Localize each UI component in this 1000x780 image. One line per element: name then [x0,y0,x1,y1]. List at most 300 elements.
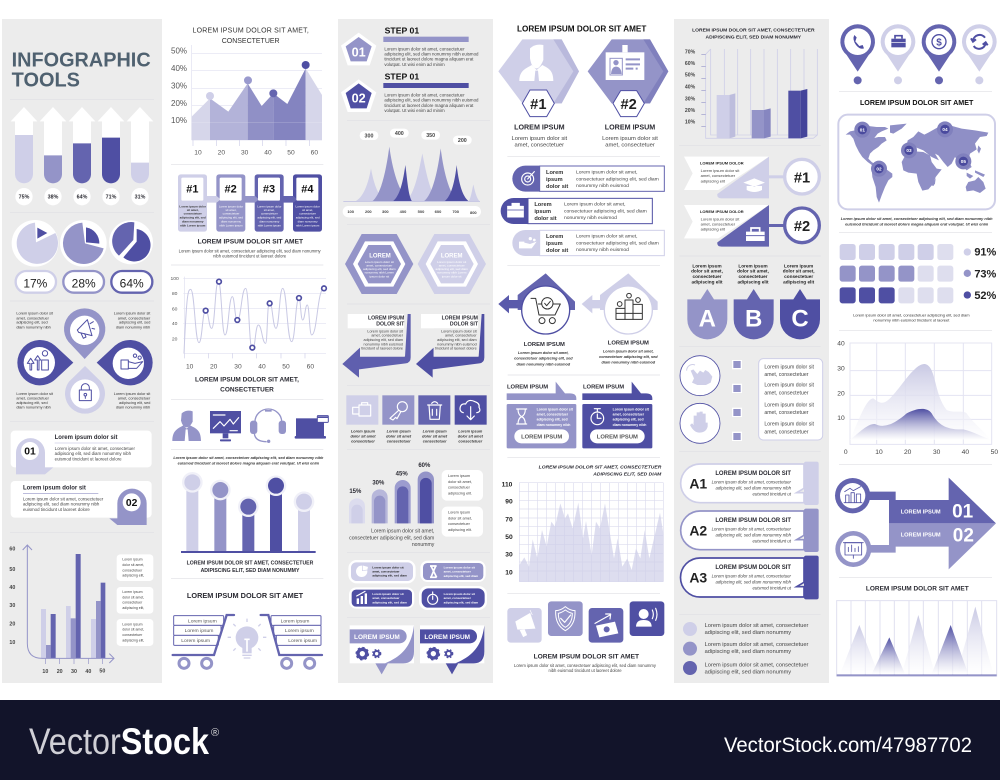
bar chart: 40 [9,585,15,591]
back arrow 2: nonummy nibh euismod [437,342,477,346]
text box: Lorem ipsum dolor sit [764,402,814,408]
tab card A3: euismod tincidunt ut [752,586,792,591]
icon: businessman [172,411,201,441]
card 02: adipiscing elit, sed diam nonummy nibh [23,502,100,507]
icon tile captions: Lorem ipsum [351,430,376,434]
text block: arrow circle captions [514,340,658,366]
text block: arrow circle captions: Lorem ipsum dolor sit amet, [518,351,569,355]
bar chart: 50 [9,567,15,573]
step 02 block: volutpat. Ut wisi enim ad minim [384,108,445,113]
text block: steps caption: nibh euismod tincidunt ut laoreet dolore [213,253,287,258]
numbered steps #1-#4: adipiscing elit, sed [180,216,206,220]
icon tile captions: dolor sit amet [350,435,376,439]
step 01 block: adipiscing elit, sed diam nonummy nibh euismod [384,52,479,57]
arrow bar chart: 75% [19,195,30,201]
icon: presentation board [843,543,863,558]
arrow diagram: 01 [952,502,974,523]
bar chart notes [117,554,153,646]
teardrop text blocks: diam nonummy nibh [116,325,150,329]
card 02: euismod tincidunt ut laoreet dolore [23,507,90,512]
text block: arrow circle captions: Lorem ipsum dolor sit amet, [603,349,654,353]
tab card A3: Lorem ipsum dolor sit amet, consectetuer [712,573,792,578]
cart left: Lorem ipsum [188,618,217,624]
bar chart: 10 [42,669,48,675]
smooth area chart: 0 [844,449,848,456]
list row 3 [512,230,664,256]
icon tile: megaphone [507,608,542,643]
text block: icon tiles caption: LOREM IPSUM DOLOR SIT AMET [534,653,639,660]
pie charts [12,220,153,267]
numbered steps #1-#4: consectetuer [184,212,203,216]
info pills: amet, consectetuer [444,569,472,573]
hexagon badge 2: ipsum dolor sit [442,274,462,278]
gesture icons [680,356,720,443]
hexagon badge 1: ipsum dolor sit [370,274,389,278]
smooth area chart: 10 [837,415,845,422]
text block: waffle caption: nonummy nibh euismod tincidunt ut laoreet [873,318,950,323]
step 01 block: tincidunt ut laoreet dolore magna aliquam erat [384,57,474,62]
numbered steps #1-#4: diam nonummy [221,219,242,223]
arched chart notes: consectetuer [448,486,471,490]
info pills: Lorem ipsum dolor sit [372,592,404,596]
numbered steps #1-#4: sit amet, [225,208,237,212]
arrow diagram [835,478,996,569]
panel: column 6 [835,24,998,676]
numbered steps #1-#4: adipiscing elit, sed [257,216,282,220]
arrow diagram: LOREM IPSUM [901,509,941,515]
map pin: briefcase [881,24,915,84]
numbered steps #1-#4 [178,174,322,232]
bullet legend: Lorem ipsum dolor sit amet, consectetuer [705,663,809,669]
peak chart: 100 [347,209,355,214]
tab card A2: LOREM IPSUM DOLOR SIT [715,518,791,524]
text block: lollipop intro: Lorem ipsum dolor sit amet, consectetuer adipiscing elit, sed diam nonummy nibh [173,456,324,460]
area chart: 60 [311,150,318,157]
text block: steps caption: Lorem ipsum dolor sit amet, consectetuer adipiscing elit, sed diam nonummy [179,248,322,253]
bullet legend: adipiscing elit, sed diam nonummy [705,630,791,636]
back arrow 1: Lorem ipsum dolor sit [367,329,403,333]
card 01: Lorem ipsum dolor sit amet, consectetuer [55,446,135,451]
text block: lollipop intro: euismod tincidunt ut laoreet dolore magna aliquam erat volutpat. Ut wisi enim [178,461,320,465]
numbered steps #1-#4: diam nonummy [182,219,204,223]
arched bar chart: 30% [372,480,385,486]
footer logo: VectorStock [29,721,209,762]
heading: area chart: CONSECTETUER [222,38,280,45]
bar chart: 60 [9,546,15,552]
profile hexagon #1: LOREM IPSUM [514,123,565,131]
hexagon badge 2 [418,234,486,294]
percentage pills [16,271,152,293]
text block: A B C captions: dolor sit amet, [783,269,815,274]
card 01: 01 [24,447,36,458]
heading: area chart: LOREM IPSUM DOLOR SIT AMET, [192,28,309,35]
numbered steps #1-#4: sit amet, [302,208,313,212]
ribbon #1 [684,157,819,198]
bubble card 1 [507,382,576,448]
tab card A2: Lorem ipsum dolor sit amet, consectetuer [712,526,792,531]
map pin: refresh [962,24,997,84]
peak chart: 200 [365,209,372,214]
text block: lollipop caption: LOREM IPSUM DOLOR SIT AMET, CONSECTETUER [187,560,314,566]
panel: column 1 [2,19,162,683]
text block: A B C captions: adipiscing elit [691,279,723,284]
list row 1: nonummy nibh euismod [576,183,629,189]
bubble card 1: Lorem ipsum dolor sit [537,407,574,411]
info pills [348,560,487,610]
line chart: 40 [172,321,178,327]
ribbon #1: amet, consectetuer [701,173,736,178]
bar chart notes: adipiscing elit, [122,574,144,578]
tab card A2: adipiscing elit, sed diam nonummy nibh [715,532,792,537]
footer url: VectorStock.com/47987702 [724,734,972,757]
step 02 block: adipiscing elit, sed diam nonummy nibh euismod [384,98,479,103]
back arrow 2: tincidunt ut laoreet dolore [435,347,477,351]
cart right: Lorem ipsum [281,618,309,624]
bar chart notes: consectetuer [122,601,143,605]
text block: grid chart title: ADIPISCING ELIT, SED DIAM [592,471,662,477]
cart right [261,615,322,668]
list row 3: nonummy nibh euismod [576,247,629,253]
hexagon badge 2: Lorem ipsum dolor sit [437,260,466,264]
tab card A2: euismod tincidunt ut [752,539,792,544]
list row 3: Lorem [546,234,563,240]
smooth area chart: 20 [904,449,912,456]
text block: lollipop caption: ADIPISCING ELIT, SED DIAM NONUMMY [201,568,300,574]
text block: steps caption: LOREM IPSUM DOLOR SIT AMET [198,238,303,245]
teardrop text blocks: amet, consectetuer [118,316,151,320]
text box: amet, consectetuer [764,429,809,435]
back arrow 1: LOREM IPSUM [368,315,404,321]
icon: growing people [27,351,48,370]
icon tile captions: dolor sit amet [422,435,448,439]
teardrop text blocks: Lorem ipsum dolor sit [16,392,54,396]
line chart: 50 [282,363,290,370]
bubble card 1: LOREM IPSUM [521,434,562,440]
arched chart notes: dolor sit amet, [448,480,472,484]
list row 2: consectetuer adipiscing elit, sed diam [564,208,647,214]
bar chart notes: adipiscing elit, [122,638,144,642]
info pills: amet, consectetuer [444,596,472,600]
bullet legend: Lorem ipsum dolor sit amet, consectetuer [705,642,809,648]
ribbon #1: Lorem ipsum dolor sit [701,168,740,173]
bubble card 2: diam nonummy nibh [613,423,646,427]
icon: shopping cart [531,298,560,324]
map pin: dollar: $ [936,37,942,48]
icon tile: cloud download [455,395,487,425]
gradient peaks chart [837,601,997,676]
tab card A3: A3 [689,569,707,585]
hexagon badge 2: nonummy nibh Lorem [437,271,467,275]
arched chart notes: adipiscing elit. [448,528,472,532]
cart left [173,615,234,668]
bar chart: 40 [85,669,91,675]
profile hexagon #1: Lorem ipsum dolor sit [511,136,568,142]
step 01 block: STEP 01 [385,25,419,35]
smooth area chart: 10 [875,449,883,456]
tab card A1: adipiscing elit, sed diam nonummy nibh [715,485,792,490]
step 02 block: Lorem ipsum dolor sit amet, consectetuer [384,92,465,97]
step 02 block: tincidunt ut laoreet dolore magna aliquam erat [384,103,474,108]
icon tile captions: Lorem ipsum [423,430,447,434]
numbered steps #1-#4: #3 [263,184,275,196]
icon: bar chart [844,487,862,503]
hexagon badge 1: LOREM [369,253,391,259]
map pin: phone [840,24,875,84]
peak chart: 500 [418,209,425,214]
3D bar chart: 70% [685,49,696,55]
back arrow 2 [416,314,484,378]
text block: A B C captions: Lorem ipsum [738,264,768,269]
hexagon badge 1 [345,234,413,294]
step 01 block: volutpat. Ut wisi enim ad minim [384,62,445,67]
numbered steps #1-#4: consectetuer [261,212,278,216]
list row 2: nonummy nibh euismod [564,215,617,221]
text block: arrow circle captions: consectetuer adipiscing elit, sed [514,357,573,361]
arched chart notes: Lorem ipsum [448,474,470,478]
text block: steps caption [179,238,322,258]
icon tile captions: dolor sit amet [458,435,484,439]
teardrop text blocks: Lorem ipsum dolor sit [16,312,54,316]
peak chart: 400 [400,209,407,214]
grid area chart: 50 [505,534,513,541]
arched bar chart: 15% [349,489,362,495]
bubble card 1: adipiscing elit, sed [537,418,568,422]
bubble card 2 [582,382,652,448]
numbered steps #1-#4: #2 [225,184,237,196]
tab card A1 [681,462,819,505]
numbered steps #1-#4: nibh Lorem ipsum [258,223,282,227]
bar chart notes: Lorem ipsum [122,590,143,594]
grid area chart: 30 [505,552,513,559]
numbered steps #1-#4: #1 [186,184,198,196]
icon: people on podium [616,293,642,319]
back arrow 2: DOLOR SIT [450,322,479,328]
area chart: 40 [264,150,272,157]
area chart [171,45,322,157]
text block: arrow circle captions: LOREM IPSUM [524,342,565,348]
title: TOOLS [12,69,80,92]
ribbon #2 [684,205,819,247]
3D bar chart: 60% [685,61,696,67]
teardrop text blocks: diam nonummy nibh [16,406,51,410]
world map: 03 [906,148,912,153]
numbered steps #1-#4: #4 [301,184,314,196]
world map: 05 [961,159,966,164]
list row 1: consectetuer adipiscing elit, sed diam [576,176,659,182]
percentage pills: 64% [120,276,144,290]
heading: 3D bar chart: LOREM IPSUM DOLOR SIT AMET, CONSECTETUER [692,27,815,33]
card 02: Lorem ipsum dolor sit amet, consectetuer [23,496,104,501]
waffle chart: 52% [974,290,997,302]
ribbon #1: LOREM IPSUM DOLOR [700,161,744,166]
peak chart: 300 [365,133,373,139]
ribbon #1: #1 [794,170,810,186]
step 01 block: 01 [352,45,366,59]
teardrop text blocks: adipiscing elit, sed [16,401,48,405]
info pills: adipiscing elit, sed diam [372,600,407,604]
icon: megaphone [77,320,95,338]
numbered steps #1-#4: nibh Lorem ipsum [219,223,243,227]
arrow bar chart: 64% [77,195,88,201]
text block: arrow circle captions: LOREM IPSUM [608,340,649,346]
lollipop chart [181,472,316,553]
map pin: dollar [922,24,956,84]
icon tile captions: Lorem ipsum [387,430,411,434]
bar chart: 30 [9,603,15,609]
hexagon badge 1: amet, consectetuer [366,263,392,267]
arched chart notes: dolor sit amet, [448,516,472,520]
teardrop text blocks: Lorem ipsum dolor sit [114,392,151,396]
info pills: Lorem ipsum dolor sit [444,565,475,569]
3D bar chart: 50% [685,73,696,79]
bubble card 2: Lorem ipsum dolor sit [613,407,650,411]
area chart: 30 [241,150,249,157]
percentage pills: 17% [23,276,48,290]
area chart: 30% [171,82,187,91]
arched chart notes: consectetuer [448,522,471,526]
heading: peaks chart: LOREM IPSUM DOLOR SIT AMET [866,586,969,593]
3D bar chart: 20% [685,108,696,114]
back arrow 2: amet, consectetuer [445,334,477,338]
info pills: adipiscing elit, sed diam [444,600,479,604]
bullet legend: adipiscing elit, sed diam nonummy [705,649,791,655]
bubble card 1: LOREM IPSUM [507,385,548,391]
bubble card 2: amet, consectetuer [613,412,645,416]
icon: monitor [210,411,241,441]
text block: A B C captions: consectetuer [784,274,813,279]
ribbon #2: adipiscing elit [701,227,726,232]
tab card A1: A1 [689,475,707,491]
numbered steps #1-#4: sit amet, [264,208,275,212]
list row 2: ipsum [534,209,551,215]
numbered steps #1-#4: diam nonummy [259,219,280,223]
numbered steps #1-#4: adipiscing elit, sed [219,216,243,220]
shield C: C [791,305,809,332]
text block: waffle caption: Lorem ipsum dolor sit amet, consectetuer adipiscing elit, sed diam [853,312,970,317]
shield C [780,289,820,339]
bar chart notes: dolor sit amet, [122,595,144,599]
text box [759,359,823,440]
text block: icon tiles caption: nibh euismod tincidunt ut laoreet dolore [548,668,622,673]
peak chart: 400 [395,131,404,137]
arrow bar chart: 38% [48,195,59,201]
profile hexagon #1: #1 [530,97,546,113]
peak chart: 350 [426,133,435,139]
profile hexagon #2: LOREM IPSUM [605,123,655,131]
icon tile: speaker [630,601,664,636]
grid area chart: 110 [502,481,513,488]
heading: line chart: CONSECTETUER [220,386,274,393]
list row 3: Lorem ipsum dolor sit amet, [576,234,637,240]
line chart: 10 [186,363,194,370]
heading: line chart: LOREM IPSUM DOLOR SIT AMET, [195,377,299,384]
speech card 2: LOREM IPSUM [424,634,470,641]
tab card A1: LOREM IPSUM DOLOR SIT [715,471,791,477]
waffle chart: 73% [974,268,997,280]
text block: A B C captions: adipiscing elit [737,279,769,284]
arrow circle: cart [498,273,575,334]
panel: column 3 [338,19,493,683]
text block: arched chart caption: nonummy [412,542,435,548]
ribbon #2: LOREM IPSUM DOLOR [700,209,744,214]
arched chart notes: Lorem ipsum [448,510,470,514]
ribbon #2: #2 [794,219,810,235]
text box: amet, consectetuer [764,410,809,416]
line chart: 20 [210,363,218,370]
line chart: 80 [172,291,178,297]
panel: column 4 [498,24,668,673]
list row 2: Lorem ipsum dolor sit amet, [564,202,625,208]
step 02 block: STEP 01 [385,71,419,81]
icon tile captions: consectetuer [458,439,483,443]
tab card A2 [681,509,819,552]
icon tile captions: consectetuer [423,439,447,443]
percentage pills: 28% [72,276,96,290]
bubble card 2: LOREM IPSUM [583,385,624,391]
icon: headset [250,409,286,443]
step 01 block [341,25,479,67]
bar chart notes: Lorem ipsum [122,558,143,562]
bar chart notes: consectetuer [122,568,143,572]
back arrow 1: tincidunt ut laoreet dolore [361,347,403,351]
icon: hand with coins [121,354,143,369]
text block: A B C captions: adipiscing elit [783,279,815,284]
arched bar chart: 45% [396,472,408,478]
grid area chart: 70 [505,516,513,523]
area chart: 10 [194,150,202,157]
speech card 1: LOREM IPSUM [354,634,400,641]
hexagon badge 2: adipiscing elit, sed diam [435,267,468,271]
card 01 [11,431,152,474]
teardrop text blocks: amet, consectetuer [16,397,50,401]
numbered steps #1-#4: Lorem ipsum dolor [296,204,320,208]
teardrop text blocks: adipiscing elit, sed [119,321,150,325]
text block: A B C captions: dolor sit amet, [691,269,723,274]
bar chart: 10 [9,640,15,646]
text block: arrow circle captions: diam nonummy nibh euismod [517,362,571,366]
arched chart notes: adipiscing elit. [448,491,472,495]
peak chart: 700 [452,209,460,214]
text block: A B C captions: dolor sit amet, [737,269,769,274]
shield A [687,289,727,339]
back arrow 2: Lorem ipsum dolor sit [441,329,477,333]
bar chart notes: consectetuer [122,633,143,637]
tab card A2: A2 [689,522,707,538]
card 02: Lorem ipsum dolor sit [23,485,86,491]
arrow bar chart [11,107,153,205]
line chart: 100 [171,276,179,282]
teardrop text blocks: adipiscing elit, sed [16,321,48,325]
heading: profiles: LOREM IPSUM DOLOR SIT AMET [517,24,646,33]
heading: carts: LOREM IPSUM DOLOR SIT AMET [187,591,304,600]
bullet legend: Lorem ipsum dolor sit amet, consectetuer [705,623,809,629]
text box: amet, consectetuer [764,372,809,378]
hexagon badge 1: nonummy nibh Lorem [365,271,395,275]
tab card A1: Lorem ipsum dolor sit amet, consectetuer [712,479,792,484]
world map: 04 [942,127,948,132]
text block: arched chart caption: consectetuer adipiscing elit, sed diam [349,535,434,541]
tab card A3 [680,556,819,599]
back arrow 1: DOLOR SIT [376,322,405,328]
list row 1: Lorem ipsum dolor sit amet, [576,170,637,176]
peak chart: 600 [435,209,442,214]
world map [838,115,995,209]
card 02 [11,481,152,525]
peak chart: 200 [458,138,467,144]
arrow circle: people [582,273,658,334]
profile hexagon #1: amet, consectetuer [515,143,564,149]
icon tile captions: dolor sit amet [386,435,412,439]
